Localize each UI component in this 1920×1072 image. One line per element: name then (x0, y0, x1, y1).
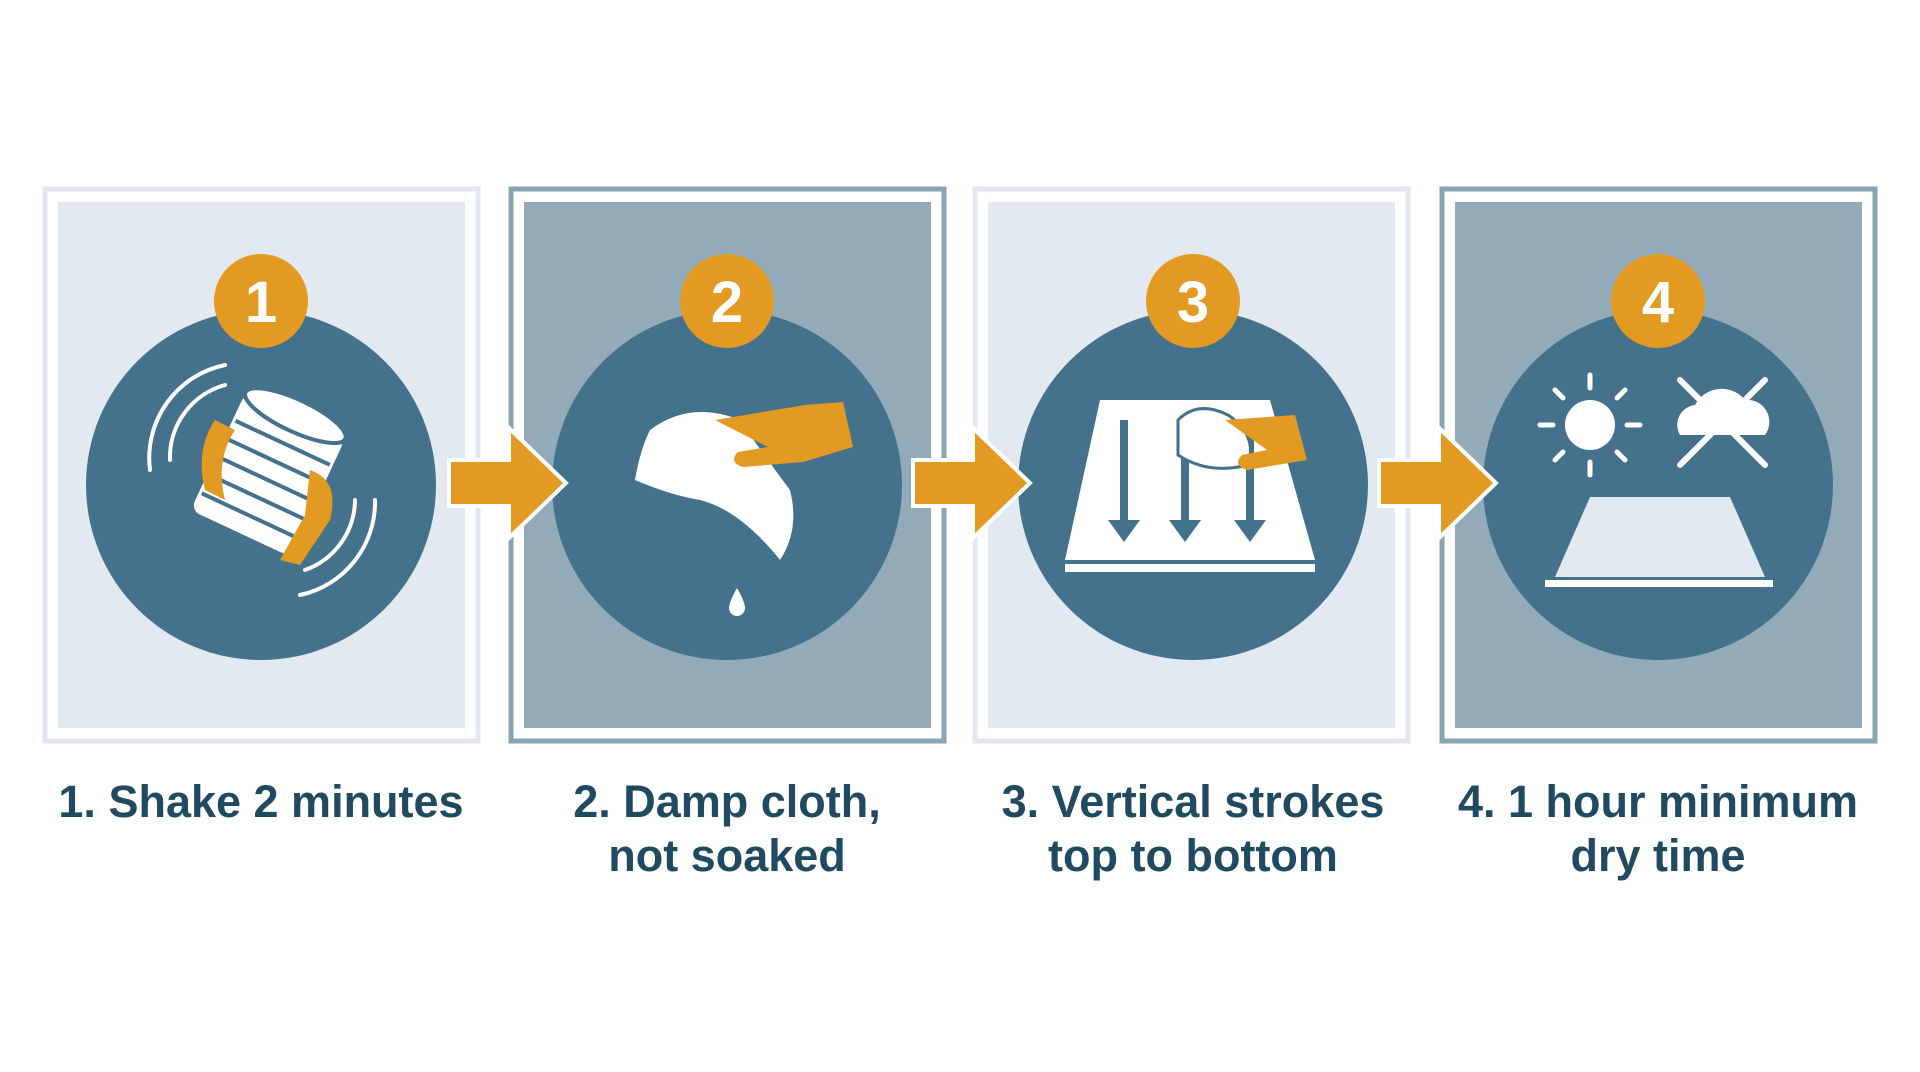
circle 3 (1018, 310, 1368, 660)
panel 1 (45, 189, 478, 741)
badge 4 (1611, 254, 1705, 348)
icon: damp cloth (635, 402, 853, 616)
label 3: top to bottom (1048, 830, 1338, 881)
panel 4 (1442, 189, 1875, 741)
badge 4: 4 (1642, 270, 1674, 335)
label 4: dry time (1570, 830, 1746, 881)
label 2: not soaked (608, 830, 846, 881)
badge 1 (214, 254, 308, 348)
icon: sun, no rain, surface (1540, 375, 1773, 587)
badge 1: 1 (245, 270, 277, 335)
circle 2 (552, 310, 902, 660)
label 4: 4. 1 hour minimum (1458, 776, 1858, 827)
label 3: 3. Vertical strokes (1002, 776, 1384, 827)
badge 2 (680, 254, 774, 348)
panel 2 (511, 189, 944, 741)
arrow 1 (449, 428, 566, 538)
arrow 3 (1379, 428, 1496, 538)
badge 3: 3 (1177, 270, 1209, 335)
circle 4 (1483, 310, 1833, 660)
badge 2: 2 (711, 270, 743, 335)
label 2: 2. Damp cloth, (573, 776, 881, 827)
icon: vertical strokes (1065, 400, 1315, 572)
badge 3 (1146, 254, 1240, 348)
arrow 2 (913, 428, 1030, 538)
panel 3 (975, 189, 1408, 741)
circle 1 (86, 310, 436, 660)
icon: shaking can (149, 365, 375, 595)
label 1: 1. Shake 2 minutes (58, 776, 464, 827)
